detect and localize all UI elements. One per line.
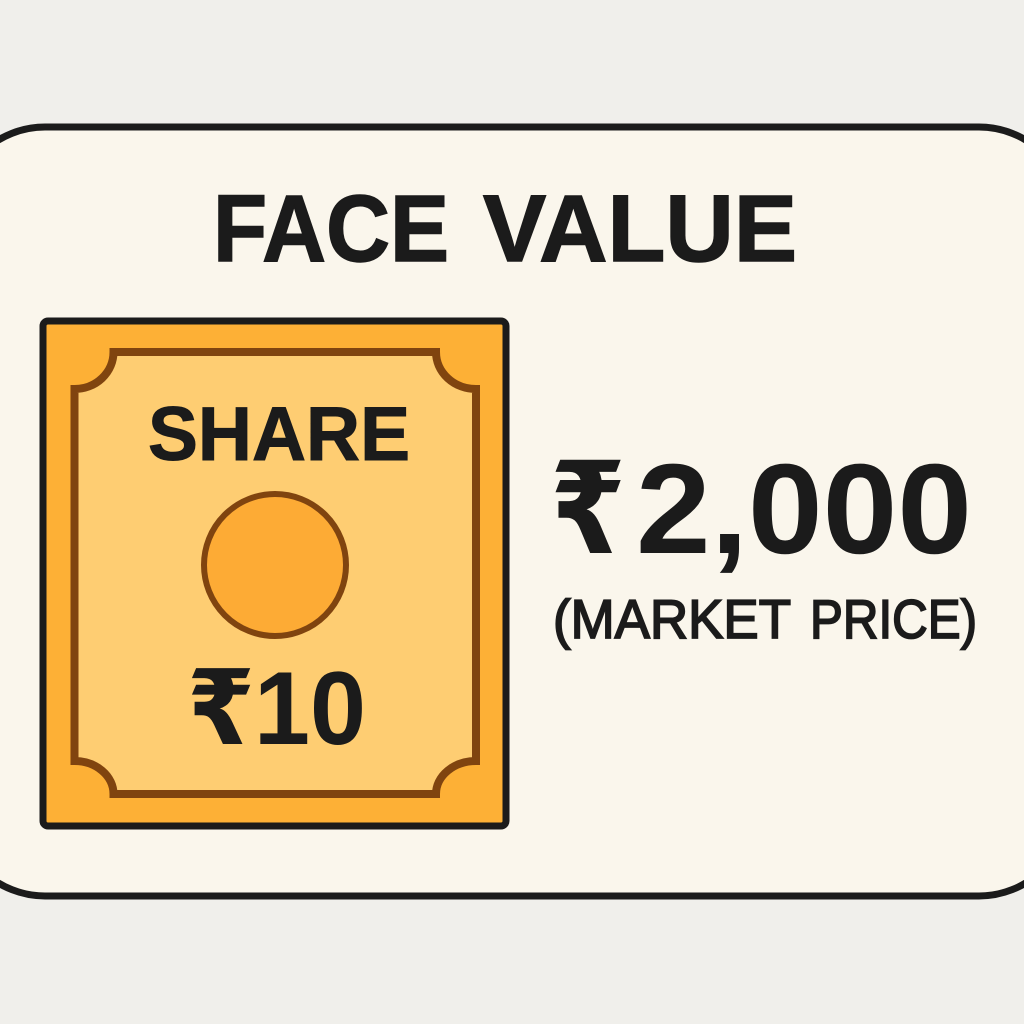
title: VALUE bbox=[483, 176, 797, 282]
icon: coin bbox=[204, 494, 346, 636]
market price amount: 2,000 bbox=[636, 438, 972, 581]
market price label: PRICE) bbox=[810, 588, 977, 650]
market price label bbox=[553, 588, 977, 650]
title: FACE bbox=[213, 176, 449, 282]
market price amount: ₹ bbox=[550, 438, 626, 581]
face value amount bbox=[187, 651, 366, 767]
title bbox=[213, 176, 797, 282]
face value amount: 10 bbox=[254, 651, 366, 767]
face value amount: ₹ bbox=[187, 651, 255, 767]
market price label: (MARKET bbox=[553, 588, 791, 650]
certificate inner border bbox=[74, 352, 476, 794]
share certificate bbox=[43, 321, 506, 826]
panel: main card bbox=[0, 127, 1024, 896]
share label: SHARE bbox=[148, 392, 410, 477]
